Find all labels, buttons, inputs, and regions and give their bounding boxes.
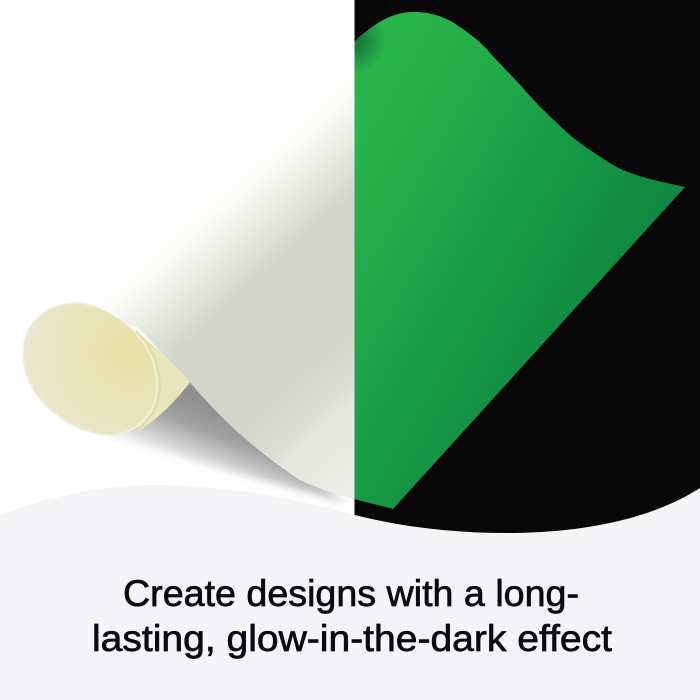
illustration: rolled cream sheet in the light <box>22 96 354 504</box>
caption line 2: lasting, glow-in-the-dark effect <box>92 618 613 659</box>
roll outer ring <box>136 331 160 430</box>
caption line 1: Create designs with a long- <box>123 573 579 614</box>
illustration: glowing green sheet in the dark <box>354 12 685 509</box>
green sheet dark corner <box>354 24 382 70</box>
roll opening <box>23 303 157 435</box>
panel: white background <box>0 0 354 530</box>
panel: black background <box>354 0 700 540</box>
roll tail <box>135 331 190 431</box>
roll glint <box>102 308 118 317</box>
caption text <box>92 573 613 659</box>
cream sheet <box>112 96 354 499</box>
cast shadow <box>104 378 345 502</box>
green sheet <box>354 12 685 509</box>
green sheet body <box>350 0 700 520</box>
panel: curved caption background <box>0 485 700 700</box>
